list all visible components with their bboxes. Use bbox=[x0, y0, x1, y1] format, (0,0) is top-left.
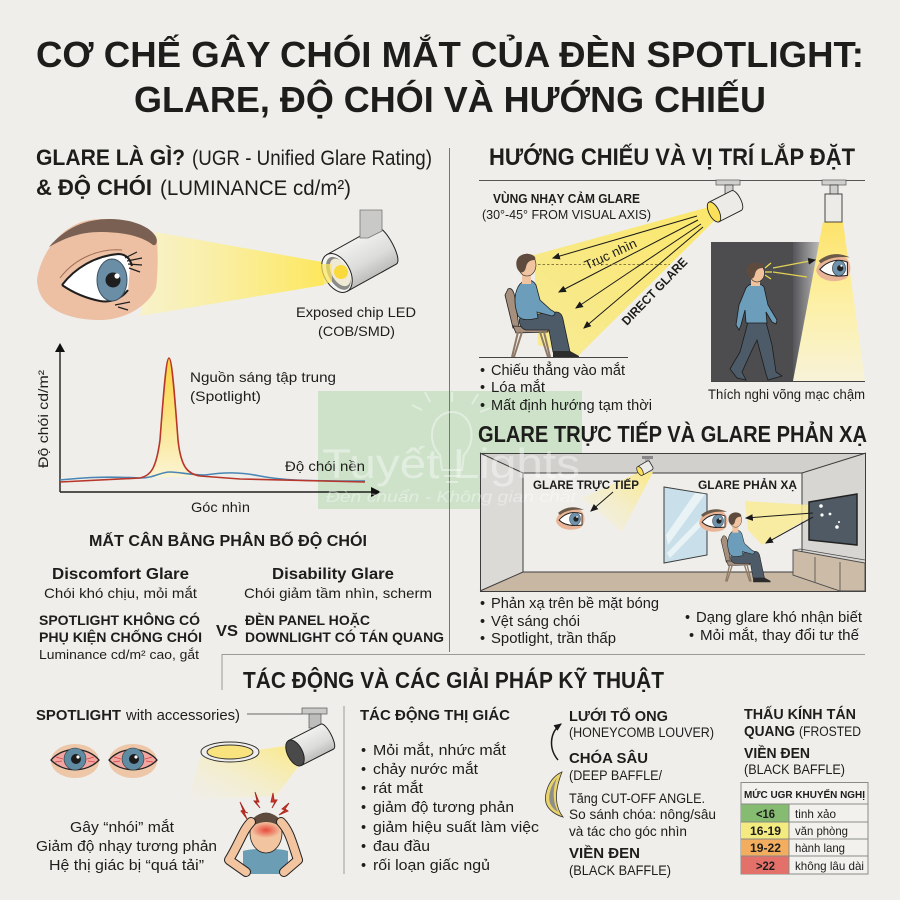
chart: luminance vs viewing angle: Nguồn sáng tập trung bbox=[190, 369, 336, 385]
panel: glare types comparison: Discomfort Glare bbox=[52, 566, 189, 583]
list: reflected glare effects bbox=[685, 610, 862, 644]
table: recommended UGR levels: <16 bbox=[756, 807, 775, 821]
heading: visual impact: TÁC ĐỘNG THỊ GIÁC bbox=[360, 706, 510, 724]
watermark: Đèn chuẩn - Không gian chất bbox=[326, 488, 577, 506]
text: solutions list: (BLACK BAFFLE) bbox=[569, 863, 671, 878]
list: reflected glare causes: • bbox=[480, 596, 485, 612]
table: recommended UGR levels: hành lang bbox=[795, 841, 845, 855]
label: direct glare: DIRECT GLARE bbox=[619, 255, 690, 328]
list: symptoms: • bbox=[361, 858, 366, 874]
table: recommended UGR levels: MỨC UGR KHUYẾN NGHỊ bbox=[744, 788, 865, 801]
label: glare sensitive zone: (30°-45° FROM VISUAL AXIS) bbox=[482, 208, 651, 222]
heading: glare definition bbox=[36, 145, 432, 200]
caption: effects: Gây “nhói” mắt bbox=[70, 819, 175, 836]
chart: luminance vs viewing angle: Độ chói nền bbox=[285, 458, 365, 474]
table: recommended UGR levels: văn phòng bbox=[795, 824, 848, 838]
diagram: dark corridor adaptation bbox=[708, 180, 865, 402]
panel: glare types comparison: PHỤ KIỆN CHỐNG CHÓI bbox=[39, 628, 202, 645]
heading: glare definition: (UGR - Unified Glare Rating) bbox=[192, 147, 432, 170]
beam: direct glare bbox=[582, 472, 653, 532]
peak fill bbox=[140, 358, 200, 478]
panel: glare types comparison: MẤT CÂN BẰNG PHÂN BỐ ĐỘ CHÓI bbox=[89, 530, 367, 550]
icon: eye direct bbox=[556, 507, 584, 530]
icon: pain bolts bbox=[240, 792, 289, 819]
icon: eye reflected bbox=[699, 509, 728, 532]
icon: spotlight with exposed chip bbox=[296, 210, 416, 320]
watermark panel bbox=[318, 391, 582, 509]
table: recommended UGR levels bbox=[741, 782, 868, 874]
visual axis dotted line bbox=[538, 264, 670, 266]
list: symptoms: • bbox=[361, 743, 366, 759]
list: direct glare effects: • bbox=[480, 398, 485, 414]
list: symptoms: Mỏi mắt, nhức mắt bbox=[373, 742, 506, 759]
chart: luminance vs viewing angle: Góc nhìn bbox=[191, 499, 250, 515]
list: direct glare effects: • bbox=[480, 363, 485, 379]
list: symptoms: chảy nước mắt bbox=[373, 761, 478, 778]
list: reflected glare effects: • bbox=[689, 628, 694, 644]
beam: reflected bbox=[745, 501, 812, 545]
list: direct glare effects: Lóa mắt bbox=[491, 379, 545, 396]
panel: spotlight effects illustration bbox=[36, 708, 337, 874]
beam: spotlight accessory bbox=[188, 746, 298, 800]
text: solutions list: VIỀN ĐEN bbox=[569, 845, 640, 862]
panel: glare types comparison: Chói khó chịu, mỏi mắt bbox=[44, 585, 197, 601]
icon: deep baffle crescent bbox=[546, 772, 563, 817]
title: CƠ CHẾ GÂY CHÓI MẮT CỦA ĐÈN SPOTLIGHT: bbox=[36, 33, 864, 75]
diagram: room bbox=[480, 453, 866, 592]
caption: effects: Giảm độ nhạy tương phản bbox=[36, 838, 217, 855]
panel: glare types comparison: ĐÈN PANEL HOẶC bbox=[245, 612, 370, 628]
panel: visual impact list bbox=[360, 706, 539, 874]
list: symptoms: • bbox=[361, 781, 366, 797]
heading: effects and solutions: TÁC ĐỘNG VÀ CÁC GIẢI PHÁP KỸ THUẬT bbox=[243, 665, 664, 693]
title: GLARE, ĐỘ CHÓI VÀ HƯỚNG CHIẾU bbox=[134, 78, 766, 120]
list: reflected glare causes: Spotlight, trần thấp bbox=[491, 631, 616, 647]
panel: technical solutions bbox=[546, 706, 868, 878]
icon: ring spot bbox=[201, 742, 259, 762]
list: symptoms: • bbox=[361, 800, 366, 816]
arrows: reflected rays bbox=[746, 513, 813, 543]
list: reflected glare effects: Mỏi mắt, thay đổi tư thế bbox=[700, 627, 859, 644]
rays toward eye bbox=[765, 260, 815, 279]
heading: glare definition: (LUMINANCE cd/m²) bbox=[160, 177, 351, 200]
text: solutions list: (HONEYCOMB LOUVER) bbox=[569, 725, 714, 740]
panel: direct and reflected glare bbox=[478, 419, 867, 647]
watermark: Tuyết Lights bbox=[322, 440, 580, 487]
arrows: direct glare rays bbox=[553, 216, 703, 328]
list: direct glare effects: • bbox=[480, 380, 485, 396]
list: reflected glare causes: Phản xạ trên bề mặt bóng bbox=[491, 596, 659, 612]
list: reflected glare effects: Dạng glare khó nhận biết bbox=[696, 610, 862, 626]
text: diffuser and baffle: (FROSTED bbox=[799, 724, 861, 739]
caption: effects bbox=[36, 819, 217, 874]
text: solutions list: LƯỚI TỔ ONG bbox=[569, 707, 668, 725]
list: symptoms bbox=[361, 742, 539, 874]
list: reflected glare causes: • bbox=[480, 631, 485, 647]
list: direct glare effects: Chiếu thẳng vào mắt bbox=[491, 361, 625, 379]
chart: luminance vs viewing angle bbox=[35, 343, 381, 515]
label: chip type: (COB/SMD) bbox=[318, 323, 395, 339]
list: reflected glare causes: • bbox=[480, 614, 485, 630]
panel: glare definition bbox=[36, 145, 432, 339]
heading: glare definition: & ĐỘ CHÓI bbox=[36, 175, 152, 200]
panel: glare types comparison: DOWNLIGHT CÓ TÁN QUANG bbox=[245, 628, 444, 645]
label: spotlight with accessories bbox=[36, 708, 240, 724]
panel: glare types comparison: SPOTLIGHT KHÔNG CÓ bbox=[39, 611, 200, 628]
list: symptoms: giảm hiệu suất làm việc bbox=[373, 820, 539, 836]
label: direct glare: GLARE TRỰC TIẾP bbox=[533, 477, 639, 492]
watermark bbox=[322, 392, 580, 506]
list: symptoms: • bbox=[361, 820, 366, 836]
label: visual axis: Trục nhìn bbox=[582, 235, 639, 273]
icon: spotlight with louver bbox=[282, 708, 337, 769]
television bbox=[809, 494, 857, 545]
chart: luminance vs viewing angle: (Spotlight) bbox=[190, 388, 261, 404]
table: recommended UGR levels: không lâu dài bbox=[795, 859, 864, 873]
icon: large eye bbox=[37, 219, 158, 320]
caption: effects: Hệ thị giác bị “quá tải” bbox=[49, 857, 204, 874]
text: solutions list: và tác cho góc nhìn bbox=[569, 824, 687, 839]
diagram: direct glare beam bbox=[534, 207, 715, 356]
panel: glare types comparison: Luminance cd/m² cao, gắt bbox=[39, 647, 199, 662]
label: exposed chip LED: Exposed chip LED bbox=[296, 304, 416, 320]
icon: ceiling spotlight vertical bbox=[822, 180, 846, 222]
panel: glare types comparison: Disability Glare bbox=[272, 566, 394, 583]
table: recommended UGR levels: 19-22 bbox=[750, 841, 781, 855]
icon: room spotlight bbox=[635, 456, 654, 477]
list: direct glare effects bbox=[480, 361, 652, 414]
mirror bbox=[664, 487, 707, 563]
cabinet bbox=[793, 549, 865, 591]
label: glare sensitive zone: VÙNG NHẠY CẢM GLARE bbox=[493, 191, 640, 206]
text: solutions list: CHÓA SÂU bbox=[569, 749, 648, 767]
panel: glare types comparison bbox=[39, 530, 444, 662]
label: glare sensitive zone bbox=[482, 191, 651, 222]
arrow: curved bbox=[552, 724, 561, 760]
table: recommended UGR levels: tinh xảo bbox=[795, 807, 836, 821]
heading: direction and position: HƯỚNG CHIẾU VÀ VỊ TRÍ LẮP ĐẶT bbox=[489, 143, 855, 171]
list: direct glare effects: Mất định hướng tạm thời bbox=[491, 398, 652, 414]
panel: glare types comparison: VS bbox=[216, 623, 238, 640]
text: diffuser and baffle: THẤU KÍNH TÁN bbox=[744, 706, 856, 723]
list: symptoms: rối loạn giấc ngủ bbox=[373, 858, 490, 874]
arrow: direct glare to eye bbox=[591, 492, 613, 511]
list: reflected glare effects: • bbox=[685, 610, 690, 626]
label: reflected glare: GLARE PHẢN XẠ bbox=[698, 477, 797, 492]
table: recommended UGR levels: 16-19 bbox=[750, 824, 781, 838]
icon: eye in light bbox=[816, 254, 850, 281]
table: recommended UGR levels: >22 bbox=[756, 859, 775, 873]
text: diffuser and baffle bbox=[744, 706, 861, 777]
heading: glare definition: GLARE LÀ GÌ? bbox=[36, 145, 185, 170]
panel: glare types comparison: Chói giảm tầm nhìn, scherm bbox=[244, 585, 432, 601]
icon: light beam from lamp to eye bbox=[140, 232, 324, 316]
text: solutions list bbox=[569, 707, 716, 878]
figure: walking man bbox=[730, 263, 782, 380]
list: symptoms: • bbox=[361, 839, 366, 855]
title bbox=[36, 33, 864, 120]
figure: seated viewer bbox=[721, 512, 771, 582]
panel: beam direction and position bbox=[479, 143, 865, 414]
icon: red eyes bbox=[51, 744, 157, 778]
label: spotlight with accessories: SPOTLIGHT bbox=[36, 708, 121, 724]
list: reflected glare causes bbox=[480, 596, 659, 647]
icon: man with headache bbox=[229, 813, 298, 874]
text: solutions list: So sánh chóa: nông/sâu bbox=[569, 807, 716, 822]
list: symptoms: giảm độ tương phản bbox=[373, 800, 514, 816]
text: diffuser and baffle: VIỀN ĐEN bbox=[744, 745, 810, 762]
icon: ceiling spotlight angled bbox=[705, 180, 745, 224]
chart: luminance vs viewing angle: Độ chói cd/m² bbox=[35, 370, 51, 468]
label: spotlight with accessories: with accessories) bbox=[125, 708, 240, 724]
text: solutions list: Tăng CUT-OFF ANGLE. bbox=[569, 791, 705, 806]
list: symptoms: • bbox=[361, 762, 366, 778]
figure: seated man bbox=[505, 254, 579, 358]
text: diffuser and baffle: QUANG bbox=[744, 723, 795, 740]
list: symptoms: rát mắt bbox=[373, 780, 423, 797]
list: symptoms: đau đầu bbox=[373, 839, 430, 855]
text: solutions list: (DEEP BAFFLE/ bbox=[569, 768, 662, 783]
caption: slow retinal adaptation: Thích nghi võng mạc chậm bbox=[708, 387, 865, 402]
list: reflected glare causes: Vệt sáng chói bbox=[491, 614, 580, 630]
text: diffuser and baffle: (BLACK BAFFLE) bbox=[744, 762, 845, 777]
